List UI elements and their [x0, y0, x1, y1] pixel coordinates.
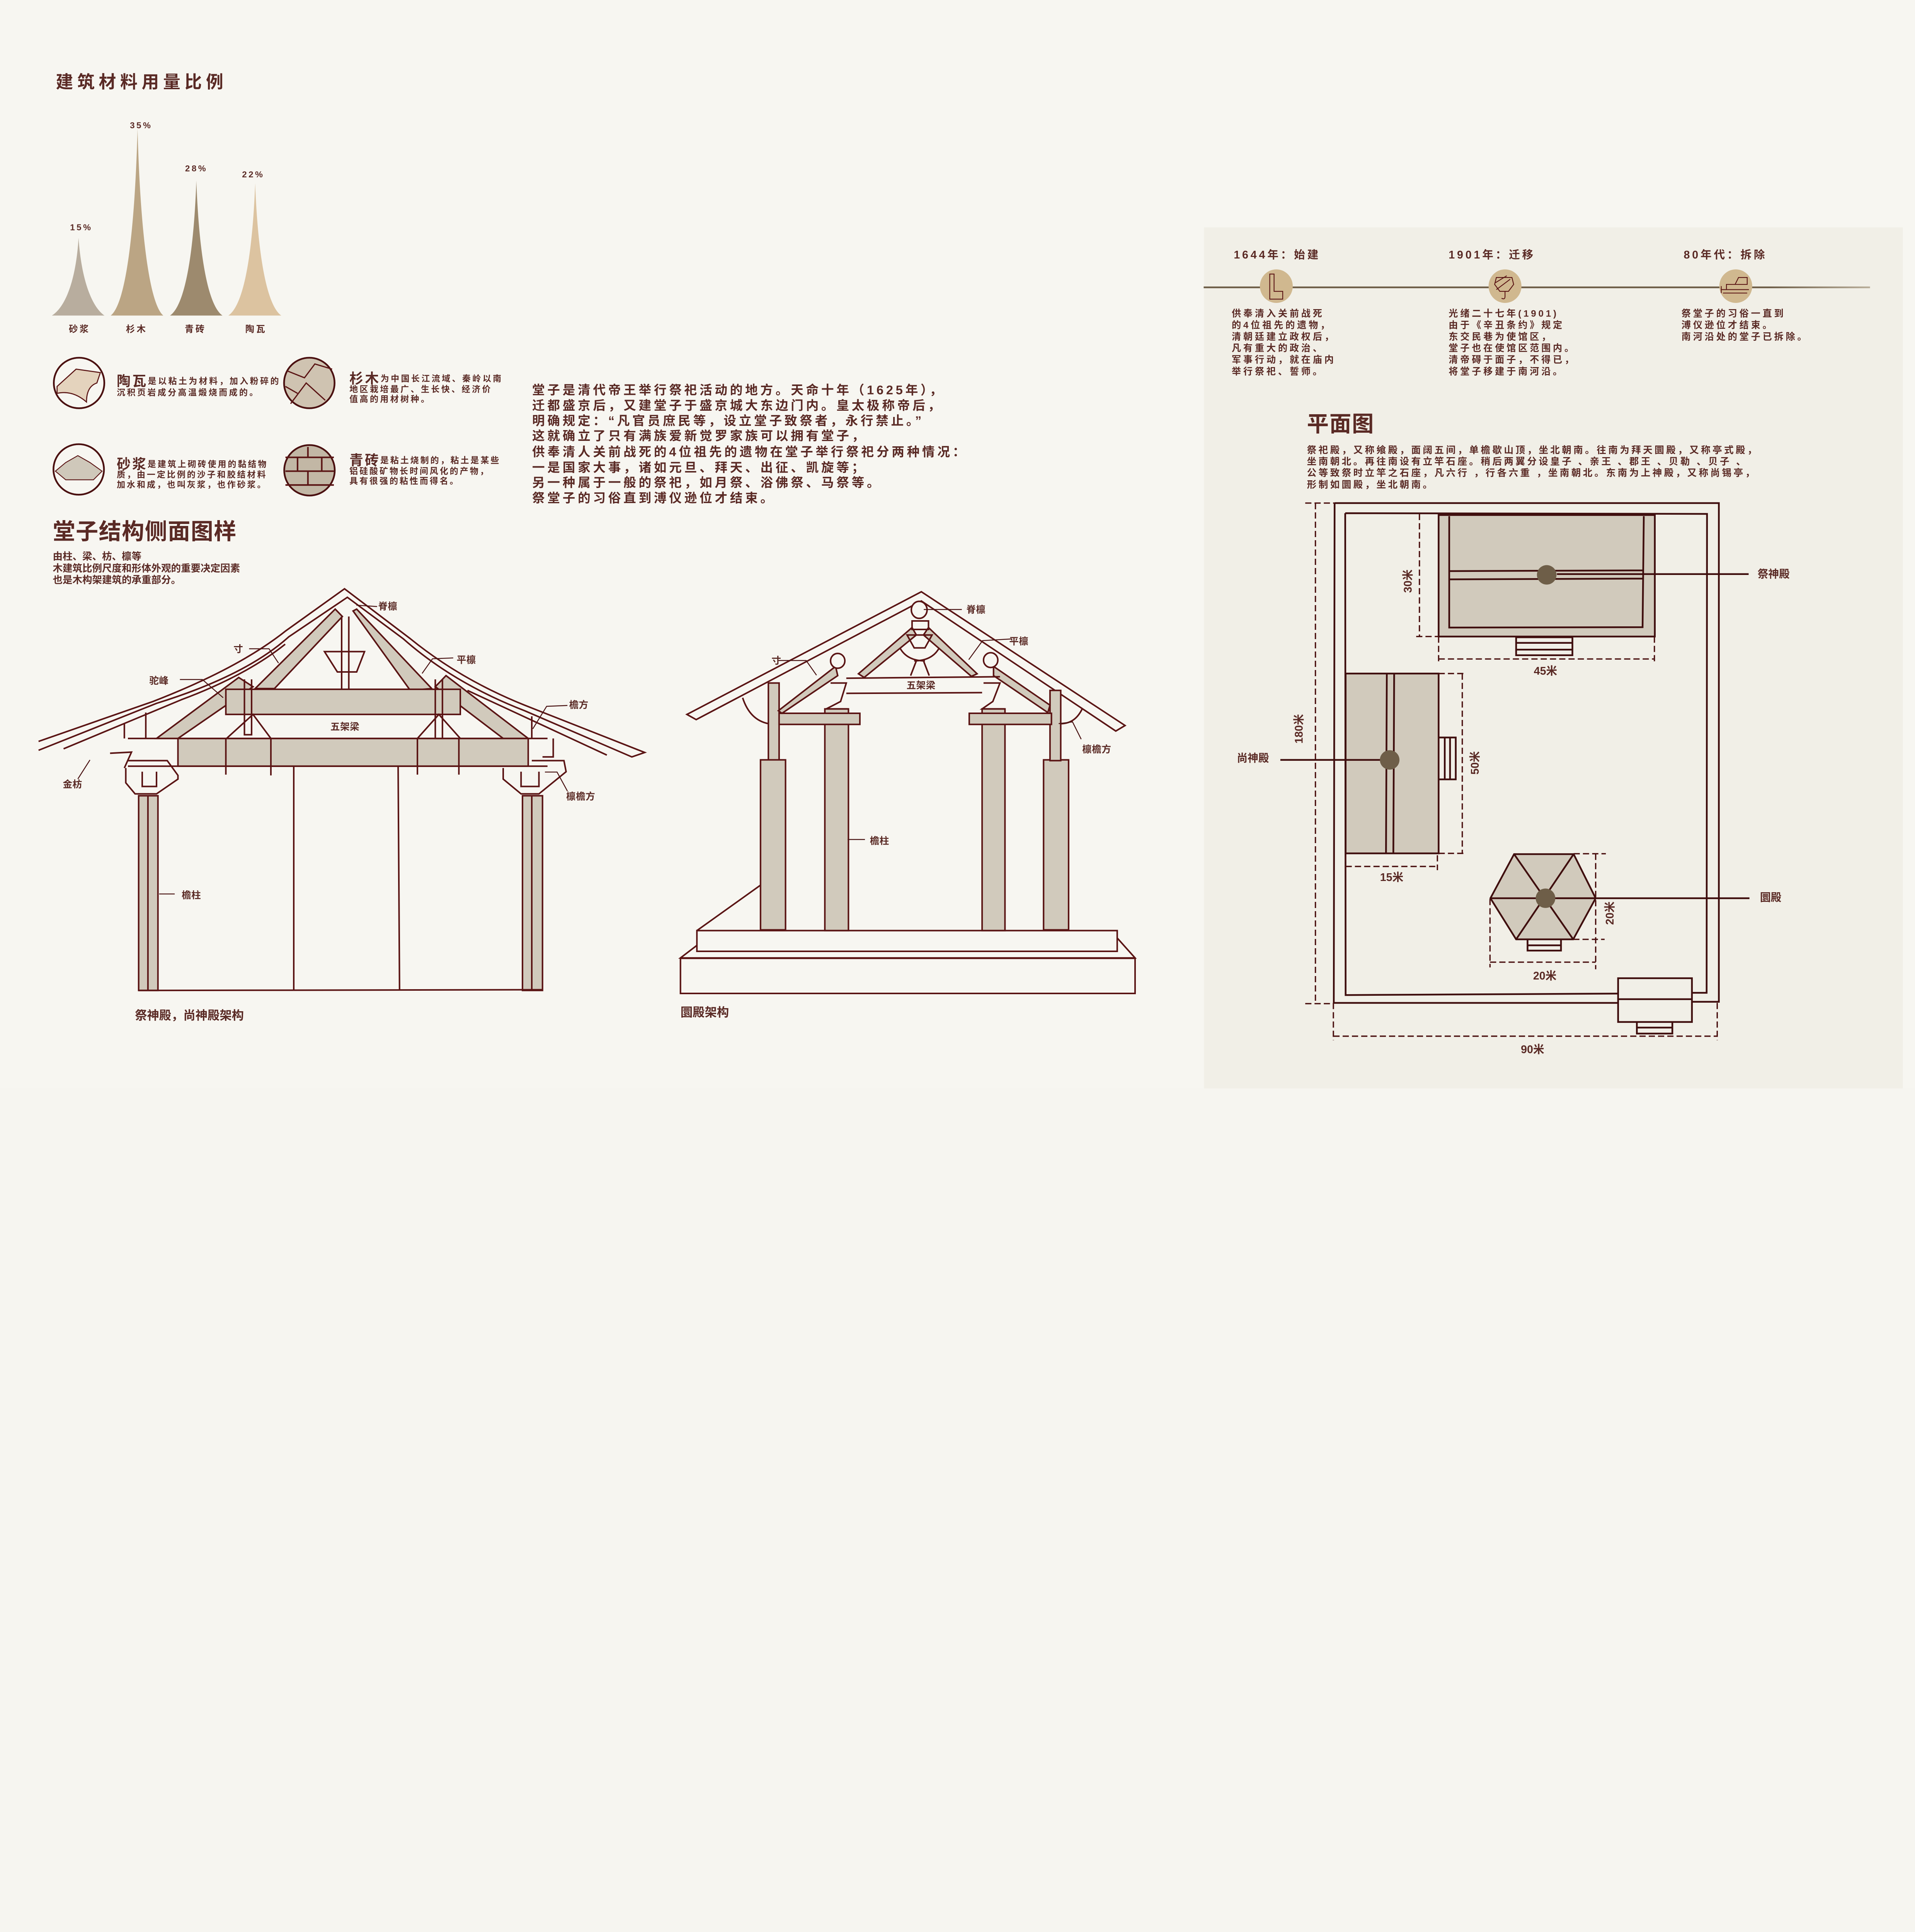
timeline entry 1980s: 祭堂子的习俗一直到	[1682, 309, 1786, 319]
frame labels: sacrificial hall: 平檩	[457, 655, 476, 665]
material note: mortar: 加水和成，也叫灰浆，也作砂浆。	[117, 480, 267, 490]
material note: mortar: 砂浆是建筑上砌砖使用的黏结物	[117, 456, 268, 472]
frame labels: sacrificial hall: 檩檐方	[566, 791, 595, 802]
plan building labels: 圜殿	[1760, 891, 1782, 903]
frame labels: sacrificial hall: 寸	[233, 644, 243, 655]
frame labels: sacrificial hall: 五架梁	[330, 721, 359, 732]
paper background	[0, 0, 1915, 1088]
timeline entry 1901: 清帝碍于面子，不得已，	[1449, 355, 1576, 365]
timeline entry 1901	[1449, 249, 1576, 377]
caption: round pavilion frame: 圜殿架构	[681, 1006, 729, 1019]
frame labels: round pavilion: 檩檐方	[1082, 743, 1111, 755]
timeline entry 1644: 供奉清入关前战死	[1232, 309, 1324, 319]
site plan drawing	[1280, 503, 1750, 1040]
material note: mortar: 质，由一定比例的沙子和胶结材料	[117, 470, 267, 480]
icon: ceramic tile	[54, 358, 104, 408]
icon: mortar	[53, 444, 104, 495]
timeline entry 1644: 凡有重大的政治、	[1232, 343, 1324, 354]
history paragraph: 明确规定：“凡官员庶民等，设立堂子致祭者，永行禁止。”	[532, 413, 924, 428]
materials chart title: 建筑材料用量比例	[56, 72, 228, 92]
materials peak chart: 砂浆	[69, 324, 90, 334]
timeline entry 1644: 军事行动，就在庙内	[1232, 355, 1336, 365]
timeline entry 1901: 1901年：迁移	[1449, 249, 1535, 261]
plan building labels: 祭神殿	[1758, 568, 1790, 580]
frame labels: round pavilion: 平檩	[1009, 636, 1028, 647]
structure section text	[53, 551, 240, 585]
material note: mortar	[117, 456, 268, 490]
plan dimension labels: 50米	[1469, 751, 1481, 775]
timeline entry 1901: 堂子也在使馆区范围内。	[1449, 343, 1576, 354]
history paragraph: 一是国家大事，诸如元旦、拜天、出征、凯旋等；	[532, 460, 867, 474]
material note: ceramic tile: 陶瓦是以粘土为材料，加入粉碎的	[117, 374, 281, 389]
timeline entry 1644: 举行祭祀、誓师。	[1232, 367, 1324, 377]
plan dimension labels: 180米	[1293, 714, 1306, 743]
material note: ceramic tile	[117, 374, 281, 397]
timeline	[1203, 269, 1870, 303]
plan dimension labels: 45米	[1534, 665, 1558, 677]
materials peak chart	[52, 121, 281, 334]
icon: fir wood	[284, 358, 335, 408]
material note: ceramic tile: 沉积页岩成分高温煅烧而成的。	[117, 388, 260, 397]
structure section heading: 堂子结构侧面图样	[53, 519, 237, 544]
history paragraph: 堂子是清代帝王举行祭祀活动的地方。天命十年（1625年），	[532, 383, 945, 397]
history paragraph: 这就确立了只有满族爱新觉罗家族可以拥有堂子，	[532, 429, 867, 443]
plan text	[1307, 444, 1759, 490]
plan building labels: 尚神殿	[1237, 752, 1269, 764]
history paragraph: 迁都盛京后，又建堂子于盛京城大东边门内。皇太极称帝后，	[532, 398, 943, 412]
material note: fir wood: 值高的用材树种。	[349, 395, 431, 404]
frame drawing: sacrificial hall	[39, 589, 645, 990]
materials peak chart: 陶瓦	[245, 324, 267, 334]
timeline entry 1980s: 80年代：拆除	[1684, 249, 1767, 261]
plan text: 坐南朝北。再往南设有立竿石座。稍后两翼分设皇子 、亲王 、郡王 、贝勒 、贝子 、	[1307, 456, 1748, 467]
timeline entry 1644: 清朝廷建立政权后，	[1232, 332, 1336, 342]
materials peak chart: 青砖	[185, 324, 206, 334]
history paragraph: 另一种属于一般的祭祀，如月祭、浴佛祭、马祭等。	[532, 475, 882, 490]
frame labels: sacrificial hall: 脊檩	[378, 601, 398, 612]
frame labels: round pavilion: 脊檩	[966, 604, 986, 615]
history paragraph: 供奉清人关前战死的4位祖先的遗物在堂子举行祭祀分两种情况：	[532, 444, 968, 459]
timeline entry 1901: 光绪二十七年(1901)	[1449, 309, 1559, 319]
plan dimension labels: 15米	[1380, 871, 1404, 884]
frame labels: sacrificial hall: 檐方	[569, 699, 589, 710]
plan dimension labels	[1293, 569, 1616, 1056]
background panel: timeline and plan	[1204, 227, 1903, 1088]
frame labels: sacrificial hall	[63, 601, 595, 901]
timeline entry 1644	[1232, 249, 1336, 377]
material note: blue brick: 具有很强的粘性而得名。	[349, 476, 460, 486]
frame labels: round pavilion: 檐柱	[870, 836, 889, 847]
frame labels: sacrificial hall: 金枋	[63, 779, 82, 790]
material note: blue brick	[349, 453, 500, 486]
frame labels: round pavilion: 五架梁	[906, 680, 936, 691]
plan text: 公等致祭时立竿之石座，凡六行 ，行各六重 ，坐南朝北。东南为上神殿，又称尚锡亭，	[1307, 467, 1757, 478]
frame labels: round pavilion: 寸	[771, 655, 781, 666]
materials peak chart: 35%	[130, 121, 152, 130]
timeline entry 1644: 1644年：始建	[1234, 249, 1321, 261]
plan building labels	[1237, 568, 1790, 903]
plan dimension labels: 20米	[1533, 970, 1557, 982]
timeline icon: crane hook	[1489, 269, 1522, 303]
history paragraph: 祭堂子的习俗直到溥仪逊位才结束。	[532, 491, 776, 505]
materials peak chart: 15%	[70, 223, 92, 232]
timeline entry 1980s	[1682, 249, 1809, 342]
plan dimension labels: 30米	[1402, 569, 1415, 593]
frame labels: sacrificial hall: 檐柱	[182, 890, 201, 901]
plan text: 形制如圜殿，坐北朝南。	[1307, 480, 1434, 490]
timeline entry 1980s: 溥仪逊位才结束。	[1682, 320, 1774, 331]
materials peak chart: 22%	[242, 170, 264, 179]
structure section text: 木建筑比例尺度和形体外观的重要决定因素	[53, 563, 240, 574]
plan dimension labels: 90米	[1521, 1043, 1544, 1056]
timeline entry 1901: 由于《辛丑条约》规定	[1449, 320, 1564, 331]
history paragraph	[532, 383, 968, 505]
frame labels: sacrificial hall: 驼峰	[149, 675, 169, 686]
frame labels: round pavilion	[771, 604, 1111, 847]
timeline entry 1980s: 南河沿处的堂子已拆除。	[1682, 332, 1809, 342]
material note: blue brick: 青砖是粘土烧制的，粘土是某些	[349, 453, 500, 468]
timeline icon: bulldozer	[1719, 269, 1752, 303]
timeline icon: ruler	[1260, 269, 1293, 303]
materials peak chart: 28%	[185, 164, 208, 173]
plan heading: 平面图	[1307, 412, 1374, 436]
timeline entry 1901: 将堂子移建于南河沿。	[1449, 367, 1564, 377]
frame drawing: round pavilion	[681, 592, 1135, 993]
material note: fir wood	[349, 371, 503, 404]
plan dimension labels: 20米	[1604, 901, 1616, 925]
structure section text: 也是木构架建筑的承重部分。	[53, 575, 181, 585]
icon: blue brick	[284, 445, 335, 495]
material note: fir wood: 杉木为中国长江流域、秦岭以南	[349, 371, 503, 386]
structure section text: 由柱、梁、枋、檩等	[53, 551, 141, 562]
material note: blue brick: 铝硅酸矿物长时间风化的产物，	[349, 466, 490, 476]
materials peak chart: 杉木	[126, 324, 147, 334]
plan text: 祭祀殿，又称飨殿，面阔五间，单檐歇山顶，坐北朝南。往南为拜天圜殿，又称亭式殿，	[1307, 444, 1759, 456]
timeline entry 1901: 东交民巷为使馆区，	[1449, 332, 1553, 342]
timeline entry 1644: 的4位祖先的遗物，	[1232, 320, 1332, 331]
material note: fir wood: 地区栽培最广、生长快、经济价	[349, 384, 492, 394]
caption: sacrificial hall frame: 祭神殿，尚神殿架构	[135, 1009, 244, 1022]
